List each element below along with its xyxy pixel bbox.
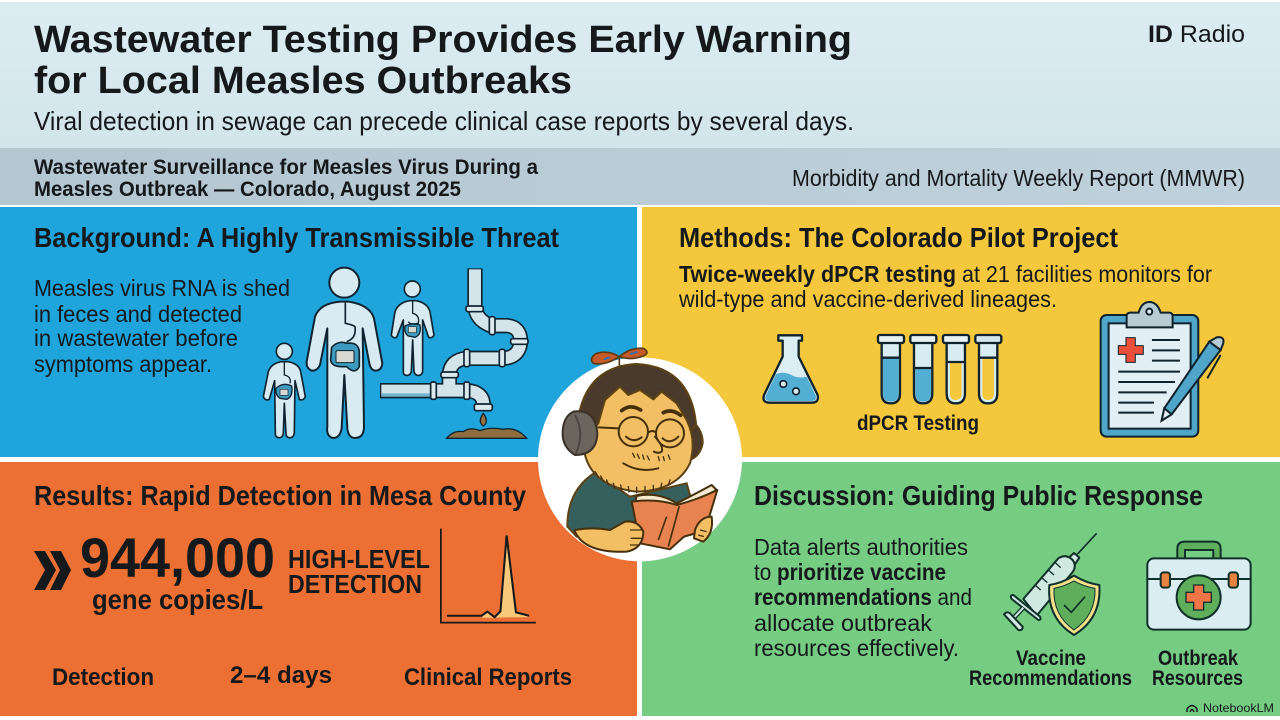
face features [595,407,684,493]
NotebookLM mark: NotebookLM [1203,701,1274,715]
timeline labels: Clinical Reports [404,664,572,691]
high-level detection [288,544,430,599]
icon: pipe [380,268,528,438]
paper title [34,156,538,201]
background heading: Background: A Highly Transmissible Threat [34,222,559,253]
discussion text: to prioritize vaccine [754,559,946,585]
icon: left child figure [263,343,305,438]
icon: chevrons [34,551,71,590]
title: Wastewater Testing Provides Early Warning [34,19,852,61]
background text [34,275,290,377]
background text: in wastewater before [34,325,238,351]
background text: Measles virus RNA is shed [34,275,290,301]
icon: right child figure [391,281,434,375]
methods heading: Methods: The Colorado Pilot Project [679,222,1118,253]
timeline labels [52,662,572,691]
icon: first aid kit [1147,542,1251,630]
title [34,19,852,102]
timeline labels: Detection [52,664,154,691]
resources label: Outbreak [1158,647,1238,670]
hair [577,364,696,440]
discussion text: recommendations and [754,584,972,610]
source band [0,148,1280,205]
panel: results [0,462,637,716]
stat: 944,000: 944,000 [80,526,275,589]
shirt [567,473,693,537]
vaccine label [969,647,1132,690]
paper title: Measles Outbreak — Colorado, August 2025 [34,178,461,201]
paper title: Wastewater Surveillance for Measles Virus During a [34,156,538,179]
peak chart [441,529,536,623]
timeline labels: 2–4 days [230,662,332,689]
discussion text: allocate outbreak [754,610,932,636]
discussion text: resources effectively. [754,635,959,661]
journal name: Morbidity and Mortality Weekly Report (MMWR) [792,165,1245,191]
vaccine label: Recommendations [969,667,1132,690]
methods text: Twice-weekly dPCR testing at 21 facilities monitors for [679,261,1212,287]
resources label [1152,647,1243,690]
title: for Local Measles Outbreaks [34,60,572,102]
panel: discussion [642,462,1280,716]
panel: background [0,207,637,457]
background text: symptoms appear. [34,351,212,377]
icon: syringe with shield [1004,533,1100,635]
icon: flask [763,335,818,403]
icon: clipboard [1101,302,1223,437]
panel: methods [642,207,1280,457]
hands [575,517,712,552]
methods text: wild-type and vaccine-derived lineages. [678,286,1057,312]
vaccine label: Vaccine [1016,647,1086,670]
background text: in feces and detected [34,301,242,327]
discussion text [754,534,972,661]
high-level detection: DETECTION [288,569,422,599]
brand: ID Radio: ID Radio [1148,21,1245,48]
stat unit: gene copies/L [92,584,263,615]
discussion heading: Discussion: Guiding Public Response [754,480,1203,511]
face [585,387,693,492]
propeller [591,348,647,368]
icon: test tubes [878,335,1001,403]
methods text [678,261,1212,312]
results heading: Results: Rapid Detection in Mesa County [34,480,526,511]
resources label: Resources [1152,667,1243,690]
mascot badge [538,348,742,561]
right headphone [689,418,703,460]
subtitle: Viral detection in sewage can precede clinical case reports by several days. [34,106,854,136]
book [632,485,717,549]
left headphone [563,411,597,455]
high-level detection: HIGH-LEVEL [288,544,430,574]
header panel [0,2,1280,148]
discussion text: Data alerts authorities [754,534,968,560]
icon: adult figure [307,268,382,438]
dPCR label: dPCR Testing [857,412,979,435]
